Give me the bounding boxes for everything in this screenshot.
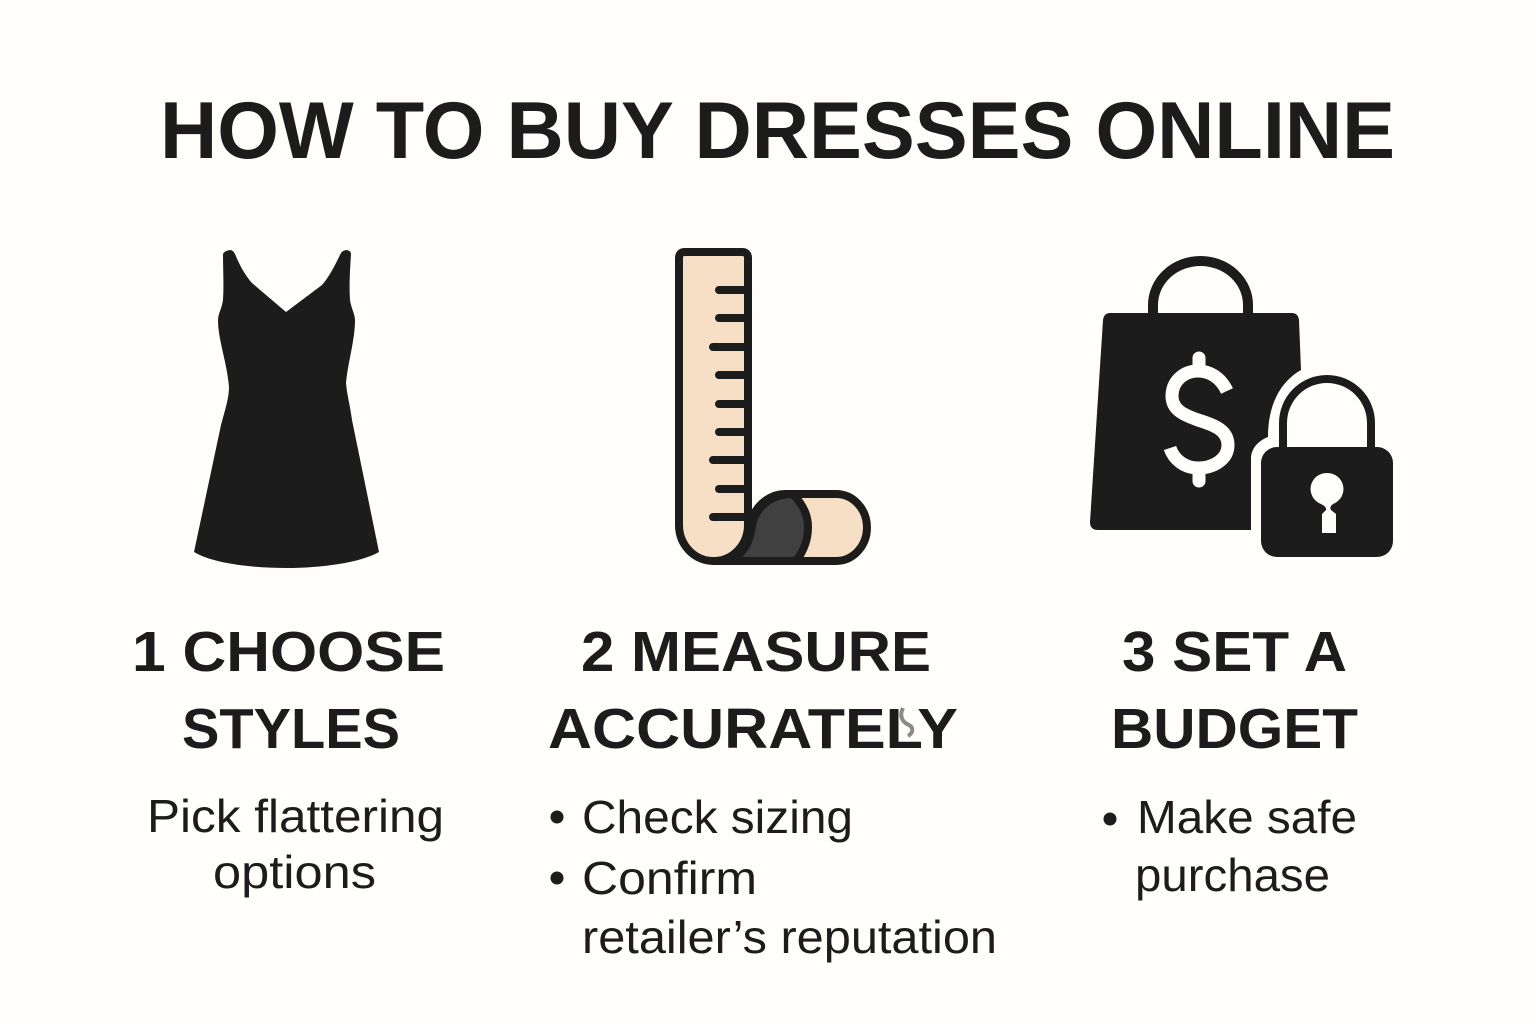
text: pick flattering options: Pick flattering [147, 790, 444, 842]
heading: 2 measure accurately [548, 620, 958, 761]
panel: step 1 choose styles [132, 250, 445, 898]
icon: padlock [1261, 379, 1393, 557]
panel: step 3 set a budget [1090, 261, 1393, 901]
title: HOW TO BUY DRESSES ONLINE [160, 86, 1395, 176]
list: check sizing, confirm retailer's reputation: retailer’s reputation [582, 911, 997, 963]
icon: black dress [194, 250, 379, 568]
icon: shopping bag with dollar sign [1090, 261, 1301, 530]
icon: measuring tape [679, 252, 867, 561]
heading: 3 set a budget: 3 SET A [1122, 620, 1347, 684]
list: make safe purchase: Make safe [1137, 791, 1357, 843]
heading: 1 choose styles: STYLES [182, 697, 400, 761]
list: check sizing, confirm retailer's reputation: Check sizing [582, 791, 853, 843]
heading: 2 measure accurately: ACCURATELY [548, 697, 958, 761]
list: check sizing, confirm retailer's reputation: Confirm [582, 852, 757, 904]
text: pick flattering options: options [213, 846, 376, 898]
heading: 3 set a budget: BUDGET [1111, 697, 1358, 761]
list: make safe purchase: purchase [1135, 849, 1330, 901]
heading: 3 set a budget [1111, 620, 1358, 761]
list: make safe purchase [1104, 791, 1357, 901]
panel: step 2 measure accurately [548, 252, 997, 963]
heading: 1 choose styles [132, 620, 445, 761]
heading: 1 choose styles: 1 CHOOSE [132, 620, 445, 684]
list: check sizing, confirm retailer's reputation [550, 791, 997, 963]
text: pick flattering options [147, 790, 444, 898]
heading: 2 measure accurately: 2 MEASURE [581, 620, 931, 684]
